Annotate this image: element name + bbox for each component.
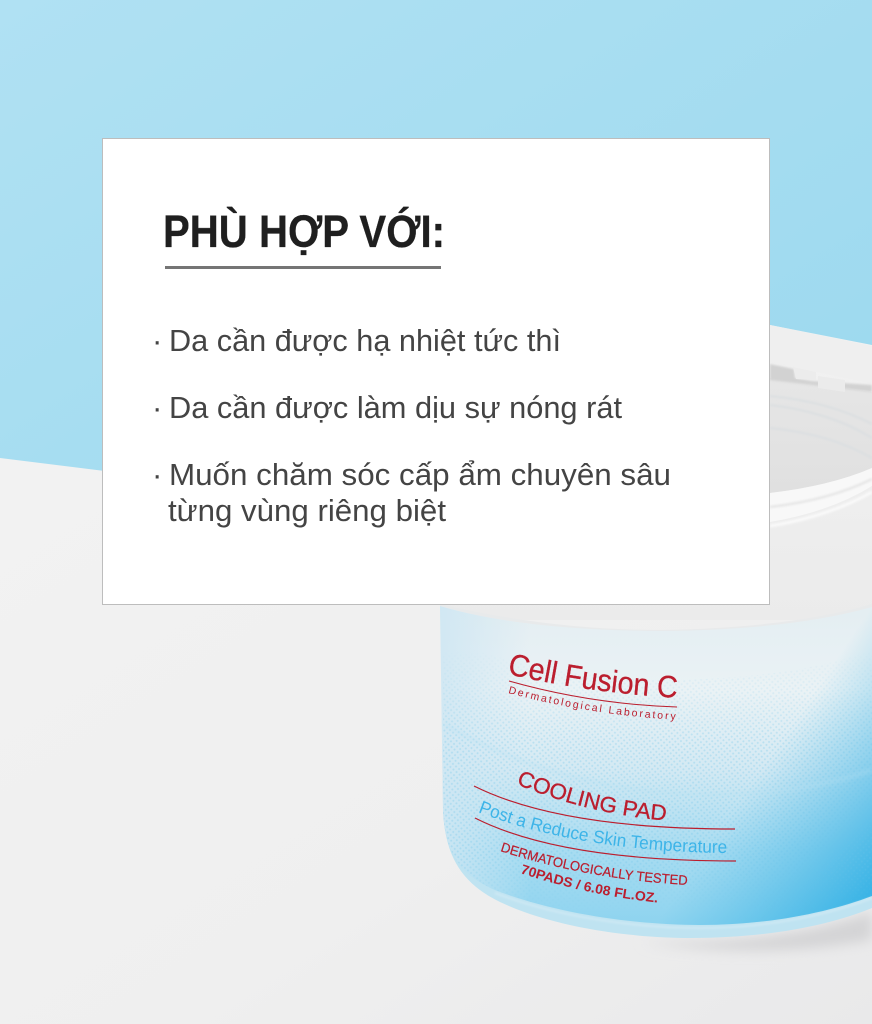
jar label: brand <box>508 654 677 722</box>
lid hinge <box>770 364 872 392</box>
jar base <box>443 800 872 938</box>
list item 3 <box>152 457 671 528</box>
list item 2: · <box>152 390 162 425</box>
product jar <box>440 325 872 938</box>
jar shoulder <box>440 604 872 660</box>
list item 1: · <box>152 323 162 358</box>
jar lid <box>440 318 872 620</box>
list item 1: Da cần được hạ nhiệt tức thì <box>169 323 561 358</box>
jar label: product name <box>474 772 736 902</box>
jar shadow <box>640 912 872 951</box>
jar label: brand: Cell Fusion C <box>510 654 677 698</box>
jar body seam <box>445 725 872 795</box>
background: white table <box>0 458 872 1024</box>
jar label: product name: DERMATOLOGICALLY TESTED <box>500 842 688 885</box>
list item 3: Muốn chăm sóc cấp ẩm chuyên sâu <box>169 457 671 492</box>
lid opening <box>770 378 872 493</box>
jar label: product name: 70PADS / 6.08 FL.OZ. <box>522 864 657 902</box>
halftone dots <box>443 668 872 888</box>
jar label: product name: COOLING PAD <box>519 772 666 820</box>
list item 3: từng vùng riêng biệt <box>168 493 446 528</box>
background: blue wall <box>0 0 872 560</box>
jar body <box>440 606 872 925</box>
jar label: brand: Dermatological Laboratory <box>508 686 676 722</box>
list item 2: Da cần được làm dịu sự nóng rát <box>169 390 622 425</box>
panel: suitable for <box>102 138 770 604</box>
lid thread ring <box>770 468 872 522</box>
heading: PHÙ HỢP VỚI: <box>163 206 445 257</box>
heading underline <box>165 266 441 269</box>
lid rim <box>770 325 872 384</box>
jar label: product name: Post a Reduce Skin Temperature <box>479 800 726 854</box>
list item 3: · <box>152 457 162 492</box>
